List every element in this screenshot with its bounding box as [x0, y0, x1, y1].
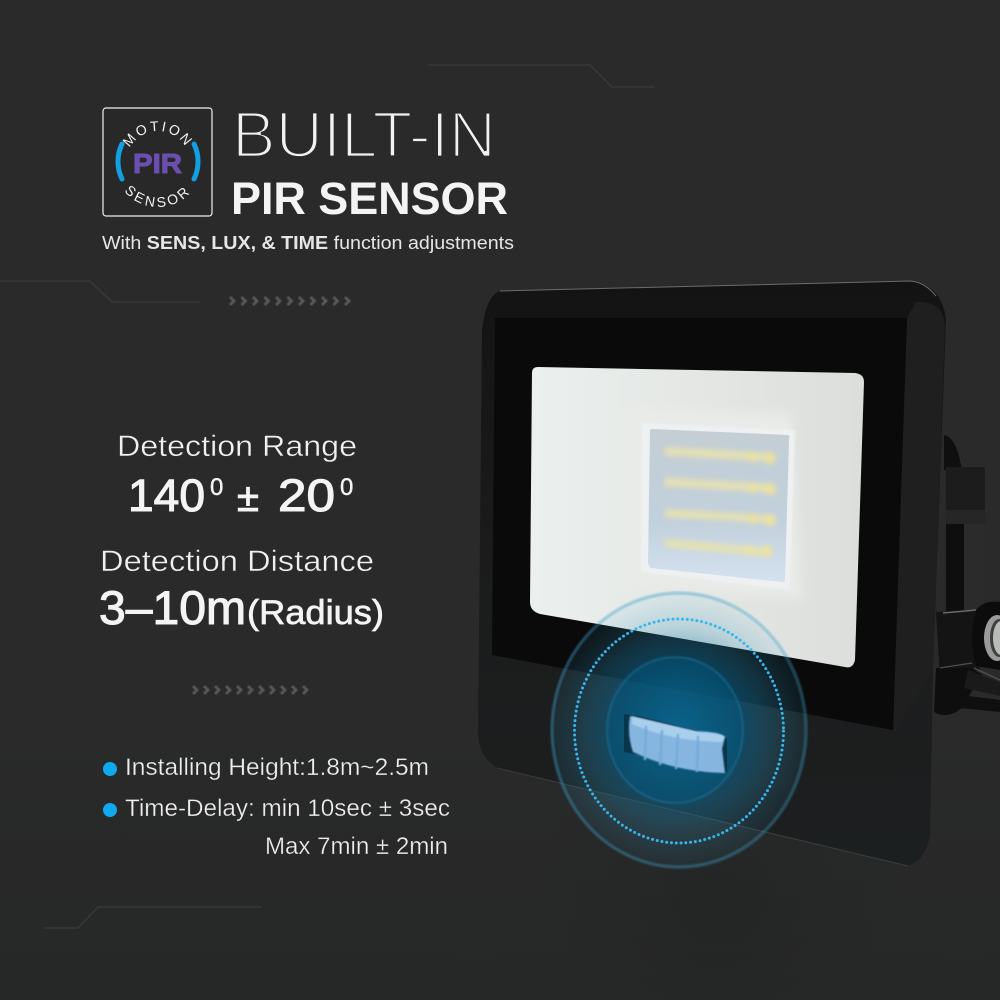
- text: detection range value: 0: [340, 474, 353, 501]
- text: detection range value: 0: [210, 474, 223, 501]
- text: detection range label: Detection Range: [117, 430, 357, 463]
- icon text: PIR: PIR: [133, 148, 182, 179]
- text: detection distance label: Detection Distance: [100, 545, 374, 578]
- bullet: installing height: Installing Height:1.8m~2.5m: [125, 754, 429, 781]
- detection glow rings: [551, 593, 806, 867]
- title: PIR SENSOR: PIR SENSOR: [231, 173, 508, 224]
- text: detection distance value: 3–10m: [99, 581, 246, 634]
- subtitle: With SENS, LUX, & TIME function adjustments: [102, 232, 514, 253]
- floodlight product: [478, 281, 1000, 867]
- bullet: time delay: Time-Delay: min 10sec ± 3sec: [125, 795, 450, 822]
- title: BUILT-IN: BUILT-IN: [232, 98, 496, 171]
- PIR sensor window: [624, 714, 727, 773]
- text: detection distance value: (Radius): [247, 594, 384, 632]
- lamp body: [478, 281, 946, 866]
- chevrons bottom: [193, 686, 307, 694]
- bracket and cable gland: [934, 435, 1000, 715]
- raised lens surround: [622, 408, 802, 600]
- icon: motion PIR sensor badge: [102, 107, 213, 217]
- text: detection range value: 140: [128, 470, 205, 521]
- icon brackets: [118, 144, 198, 179]
- bullet: time delay: Max 7min ± 2min: [265, 833, 448, 860]
- chevrons top: [230, 297, 349, 305]
- text: detection range value: 20: [278, 470, 335, 521]
- text: detection distance value: [99, 581, 384, 634]
- icon text: SENSOR: SENSOR: [126, 186, 190, 207]
- decorative circuit lines: [0, 65, 655, 928]
- text: detection range value: ±: [237, 476, 259, 520]
- LED rows: [665, 451, 776, 557]
- LED lens: [648, 429, 789, 582]
- white panel: [530, 367, 864, 667]
- text: detection range value: [128, 470, 353, 521]
- lamp recess: [492, 318, 907, 730]
- icon text: MOTION: MOTION: [122, 121, 192, 147]
- bullet: time delay: [103, 795, 450, 860]
